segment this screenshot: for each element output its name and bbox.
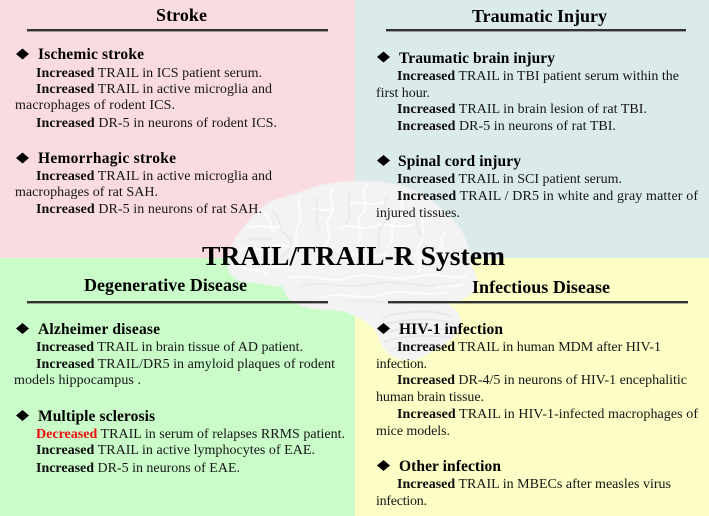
text block: Spinal cord injury: Spinal cord injury	[398, 153, 521, 170]
text block: HIV-1 infection: human brain tissue.	[376, 390, 484, 405]
divider: Traumatic Injury heading rule	[386, 29, 686, 31]
icon: central brain	[228, 181, 477, 360]
text block: Alzheimer disease	[14, 321, 335, 388]
text block: Alzheimer disease: Increased TRAIL/DR5 in amyloid plaques of rodent	[36, 357, 335, 372]
text block: Ischemic stroke	[15, 46, 277, 131]
heading: Infectious Disease: Infectious Disease	[472, 277, 610, 297]
text block: Multiple sclerosis: Increased DR-5 in neurons of EAE.	[36, 461, 240, 476]
text block: Ischemic stroke: Ischemic stroke	[38, 46, 144, 63]
text block: HIV-1 infection	[376, 321, 698, 439]
text block: Multiple sclerosis: Increased TRAIL in active lymphocytes of EAE.	[36, 443, 315, 458]
text block: Hemorrhagic stroke: macrophages of rat SAH.	[15, 185, 158, 200]
panel: traumatic injury background	[355, 0, 709, 258]
panel: Infectious Disease	[376, 277, 698, 509]
panel: Traumatic Injury	[376, 6, 698, 221]
divider: Degenerative Disease heading rule	[27, 301, 328, 303]
text block: HIV-1 infection: HIV-1 infection	[399, 321, 503, 338]
title: TRAIL/TRAIL-R System	[202, 240, 505, 271]
text block: Spinal cord injury: Increased TRAIL in SCI patient serum.	[397, 172, 622, 187]
text block: Ischemic stroke: Increased TRAIL in active microglia and	[36, 82, 272, 97]
heading: Degenerative Disease: Degenerative Disease	[84, 275, 247, 295]
text block: Spinal cord injury	[376, 153, 698, 221]
text block: Multiple sclerosis	[16, 408, 345, 476]
text block: HIV-1 infection: Increased TRAIL in human MDM after HIV-1	[397, 340, 661, 355]
text block: HIV-1 infection: Increased TRAIL in HIV-1-infected macrophages of	[397, 407, 698, 422]
panel: Degenerative Disease	[14, 275, 345, 476]
text block: Hemorrhagic stroke	[15, 150, 272, 217]
panel: stroke background	[0, 0, 355, 258]
panel: Stroke	[15, 5, 328, 217]
text block: Traumatic brain injury: Increased TRAIL in brain lesion of rat TBI.	[397, 102, 647, 117]
text block: Alzheimer disease: models hippocampus .	[14, 373, 141, 388]
text block: HIV-1 infection: infection.	[376, 357, 427, 372]
text block: Hemorrhagic stroke: Increased TRAIL in active microglia and	[36, 169, 272, 184]
divider: Stroke heading rule	[27, 29, 328, 31]
text block: Traumatic brain injury: Increased DR-5 in neurons of rat TBI.	[397, 119, 616, 134]
text block: Ischemic stroke: macrophages of rodent ICS.	[15, 98, 175, 113]
text block: Other infection	[376, 458, 671, 509]
text block: Traumatic brain injury: first hour.	[376, 86, 430, 101]
text block: Other infection: infection.	[376, 494, 427, 509]
text block: Traumatic brain injury: Increased TRAIL in TBI patient serum within the	[397, 69, 679, 84]
text block: Hemorrhagic stroke: Increased DR-5 in neurons of rat SAH.	[36, 202, 262, 217]
text block: Multiple sclerosis: Decreased TRAIL in serum of relapses RRMS patient.	[36, 427, 345, 442]
text block: Spinal cord injury: Increased TRAIL / DR5 in white and gray matter of	[397, 189, 698, 204]
text block: HIV-1 infection: mice models.	[376, 424, 450, 439]
text block: Multiple sclerosis: Multiple sclerosis	[38, 408, 155, 425]
text block: Alzheimer disease: Alzheimer disease	[38, 321, 160, 338]
text block: Ischemic stroke: Increased TRAIL in ICS patient serum.	[36, 66, 262, 81]
text block: Traumatic brain injury: Traumatic brain injury	[399, 50, 555, 67]
divider: Infectious Disease heading rule	[388, 301, 688, 303]
text block: Traumatic brain injury	[376, 50, 679, 134]
heading: Stroke: Stroke	[156, 5, 207, 25]
text block: Ischemic stroke: Increased DR-5 in neurons of rodent ICS.	[36, 116, 277, 131]
heading: Traumatic Injury: Traumatic Injury	[472, 6, 607, 26]
text block: HIV-1 infection: Increased DR-4/5 in neurons of HIV-1 encephalitic	[397, 373, 687, 388]
text block: Spinal cord injury: injured tissues.	[376, 206, 460, 221]
panel: degenerative disease background	[0, 258, 355, 516]
text block: Other infection: Increased TRAIL in MBECs after measles virus	[397, 477, 671, 492]
panel: infectious disease background	[355, 258, 709, 516]
text block: Other infection: Other infection	[399, 458, 501, 475]
text block: Hemorrhagic stroke: Hemorrhagic stroke	[38, 150, 176, 167]
text block: Alzheimer disease: Increased TRAIL in brain tissue of AD patient.	[36, 340, 303, 355]
